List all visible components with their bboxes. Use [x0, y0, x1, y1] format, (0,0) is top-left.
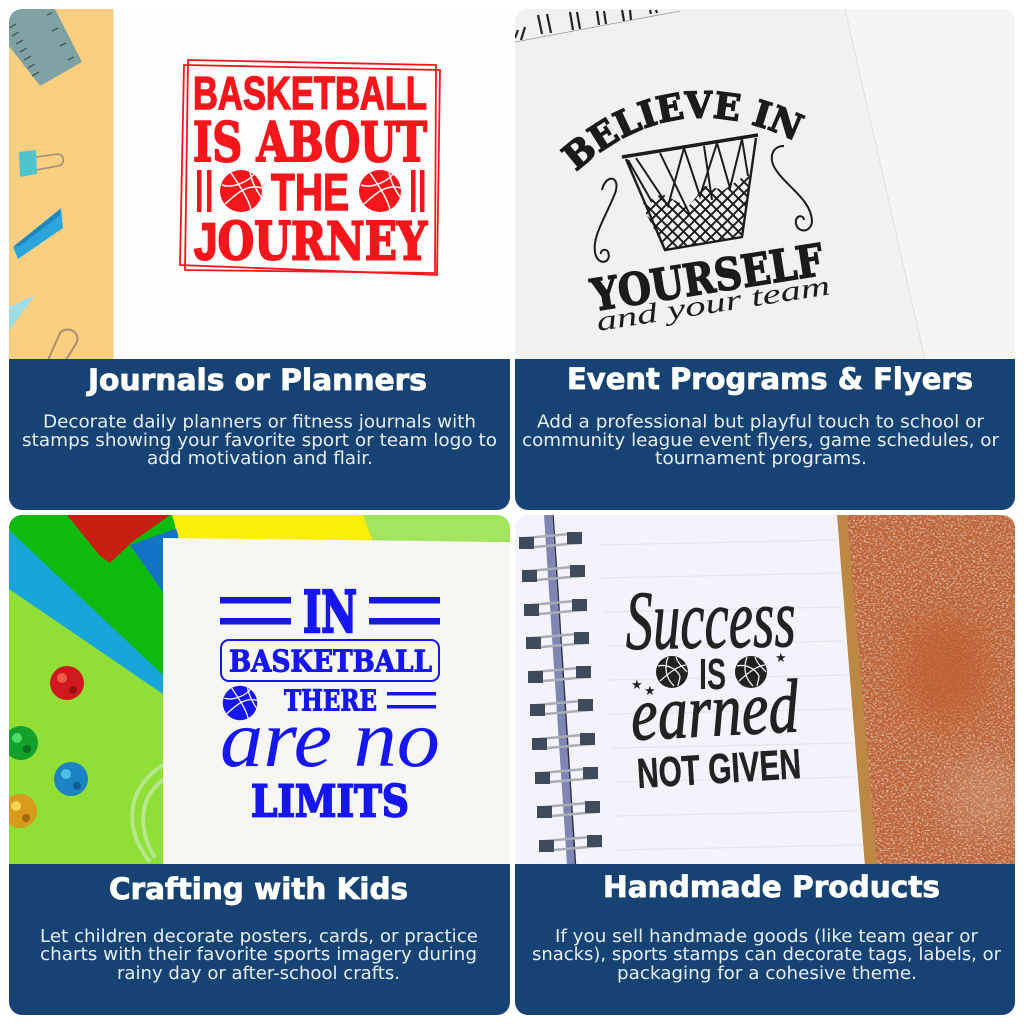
icon: basketball hoop: [622, 133, 758, 252]
heading: Crafting with Kids: [109, 872, 408, 906]
stamp line: yourself: YOURSELF: [587, 235, 827, 322]
stamp line: and your team: and your team: [594, 270, 832, 338]
icon: red clip: [67, 515, 170, 563]
stamp: basketball is about the journey: [180, 60, 440, 275]
body text: community league event flyers, game schedules, or: [522, 431, 1000, 451]
stamp: success is earned not given: [625, 572, 802, 797]
stamp line: in: IN: [303, 579, 357, 646]
photo: spiral notebook on leather: [515, 515, 1024, 865]
notebook page: [515, 515, 865, 865]
stamp line: earned: earned: [628, 664, 801, 757]
body text: Add a professional but playful touch to school or: [537, 412, 985, 432]
stamp outline box: [221, 640, 439, 681]
stamp bars: [220, 597, 440, 708]
panel: handmade products: [515, 515, 1024, 1015]
photo: stationery on yellow with red stamp: [9, 9, 441, 359]
stamp line: is about: IS ABOUT: [193, 110, 427, 174]
body text: charts with their favorite sports imagery during: [40, 945, 477, 965]
stamp: believe in yourself and your team: [559, 90, 830, 330]
body text: [23, 414, 496, 464]
leather background: [840, 515, 1024, 865]
body text: [522, 412, 1000, 469]
stamp line: the: THE: [271, 164, 349, 222]
body text: Decorate daily planners or fitness journals with: [43, 412, 476, 432]
icon: blue pencil case: [13, 208, 63, 259]
body text: stamps showing your favorite sport or team logo to: [22, 431, 497, 451]
icon: binder clip: [19, 150, 63, 177]
icon: ruler: [9, 9, 82, 86]
caption background: [515, 359, 1015, 510]
panel: event programs and flyers: [515, 9, 1015, 510]
body text: add motivation and flair.: [147, 449, 373, 469]
stamp line: are no: are no: [220, 693, 440, 784]
icon: sequins: [3, 666, 88, 828]
heading: Event Programs & Flyers: [567, 362, 973, 396]
stamp line: journey: JOURNEY: [194, 212, 428, 272]
white card: [163, 538, 510, 865]
photo: notebook with black stamp: [515, 9, 1015, 359]
stamp line: believe in: BELIEVE IN: [559, 90, 806, 172]
photo: colourful craft paper with blue stamp: [3, 515, 510, 865]
stamp line: limits: LIMITS: [251, 776, 409, 828]
panel: journals or planners: [9, 9, 510, 510]
stamp line: not given: NOT GIVEN: [636, 740, 802, 797]
stamp frames: [180, 60, 440, 275]
icon: right scroll: [772, 146, 812, 230]
stamp bars and balls: [197, 170, 424, 212]
body text: Let children decorate posters, cards, or practice: [40, 927, 478, 947]
body text: tournament programs.: [655, 449, 867, 469]
stamp line: success: Success: [625, 572, 796, 668]
icon: left scroll: [595, 179, 617, 262]
caption background: [9, 864, 510, 1015]
icon: glass jar edge: [132, 765, 163, 862]
icon: stars: ★: [631, 678, 643, 693]
body text: rainy day or after-school crafts.: [117, 964, 400, 984]
icon: paper plane: [9, 295, 35, 331]
body text: [532, 927, 1002, 984]
stamp: in basketball there are no limits: [220, 579, 440, 828]
icon: volleyballs: [656, 656, 767, 688]
icon: paper clip: [48, 330, 77, 360]
icon: star: ★: [644, 684, 656, 699]
notebook cover edge: [837, 515, 877, 865]
body text: [40, 927, 478, 984]
body text: If you sell handmade goods (like team gear or: [555, 927, 979, 947]
ruled lines: [600, 540, 860, 850]
body text: packaging for a cohesive theme.: [617, 964, 917, 984]
notebook rings: [519, 532, 602, 852]
notebook spirals: [515, 10, 680, 42]
caption background: [9, 359, 510, 510]
body text: snacks), sports stamps can decorate tags, labels, or: [532, 945, 1002, 965]
stamp line: there: THERE: [284, 684, 377, 718]
stamp line: is: IS: [699, 650, 726, 699]
icon: star right: ★: [775, 651, 787, 666]
stamp line: basketball: BASKETBALL: [229, 644, 432, 680]
caption background: [515, 864, 1015, 1015]
heading: Handmade Products: [603, 870, 940, 904]
icon: basketball: [223, 686, 257, 720]
notebook spine: [548, 515, 571, 865]
panel: crafting with kids: [3, 515, 510, 1015]
heading: Journals or Planners: [86, 363, 427, 397]
stamp line: basketball: BASKETBALL: [193, 67, 427, 119]
